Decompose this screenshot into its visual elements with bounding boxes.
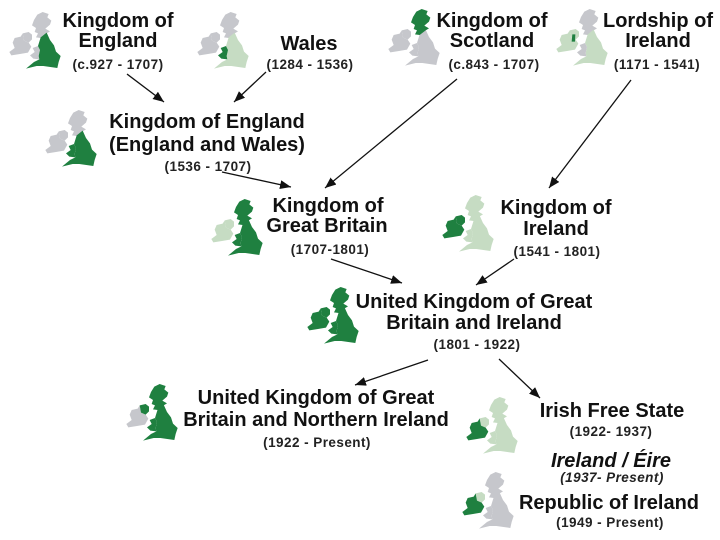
arrow: United Kingdom to Irish Free State — [499, 359, 540, 398]
heading: Kingdom of England: England — [79, 30, 157, 52]
date: 1922 - 1937: (1922- 1937) — [570, 424, 652, 439]
map: Kingdom of Scotland — [388, 9, 440, 66]
heading: Lordship of Ireland: Ireland — [625, 30, 691, 52]
heading: Kingdom of Great Britain: Great Britain — [266, 215, 388, 237]
heading: United Kingdom of Great Britain and Ireland: Britain and Ireland — [386, 312, 562, 334]
heading: Irish Free State: Irish Free State — [540, 400, 684, 422]
heading: Kingdom of Ireland: Kingdom of — [500, 197, 612, 219]
date: 1171 - 1541: (1171 - 1541) — [614, 57, 700, 72]
heading: United Kingdom of Great Britain and Ireland: United Kingdom of Great — [356, 291, 592, 313]
date: 1707-1801: (1707-1801) — [291, 242, 369, 257]
heading: Kingdom of England (England and Wales): Kingdom of England — [109, 111, 305, 133]
heading: Kingdom of England (England and Wales): (England and Wales) — [109, 134, 305, 156]
map: Kingdom of England — [9, 12, 61, 69]
map: Wales — [197, 12, 249, 69]
heading: Kingdom of Scotland: Kingdom of — [436, 10, 548, 32]
heading: Kingdom of Great Britain: Kingdom of — [272, 195, 384, 217]
date: 1801 - 1922: (1801 - 1922) — [434, 337, 520, 352]
heading: United Kingdom of Great Britain and Northern Ireland: Britain and Northern Ireland — [183, 409, 449, 431]
arrow: United Kingdom to Northern Ireland era — [355, 360, 428, 385]
arrow: England to England and Wales — [127, 74, 164, 102]
heading: Wales: Wales — [280, 33, 338, 55]
map: United Kingdom of Great Britain and Northern Ireland — [126, 384, 178, 441]
heading: Kingdom of England: Kingdom of — [62, 10, 174, 32]
map: Republic of Ireland — [462, 472, 514, 529]
date: 1541 - 1801: (1541 - 1801) — [514, 244, 600, 259]
heading: Lordship of Ireland: Lordship of — [603, 10, 713, 32]
date: 1536 - 1707: (1536 - 1707) — [165, 159, 251, 174]
heading: Ireland / Éire: Ireland / Éire — [551, 449, 671, 472]
map: Kingdom of Ireland — [442, 195, 494, 252]
heading: Kingdom of Scotland: Scotland — [450, 30, 534, 52]
map: Lordship of Ireland — [556, 9, 608, 66]
arrow: Wales to England and Wales — [234, 72, 266, 102]
heading: United Kingdom of Great Britain and Northern Ireland: United Kingdom of Great — [198, 387, 434, 409]
heading: Republic of Ireland: Republic of Ireland — [519, 492, 699, 514]
date: 1922 - Present: (1922 - Present) — [263, 435, 371, 450]
arrow: Kingdom of Ireland to United Kingdom — [476, 259, 514, 285]
arrow: England and Wales to Great Britain — [222, 172, 291, 187]
map: Kingdom of Great Britain — [211, 199, 263, 256]
arrow: Scotland to Great Britain — [325, 79, 457, 188]
date: 1284 - 1536: (1284 - 1536) — [267, 57, 353, 72]
map: United Kingdom of Great Britain and Ireland — [307, 287, 359, 344]
date: c.927 - 1707: (c.927 - 1707) — [72, 57, 164, 72]
heading: Kingdom of Ireland: Ireland — [523, 218, 589, 240]
map: Irish Free State — [466, 397, 518, 454]
date: 1937 - Present: (1937- Present) — [560, 470, 664, 485]
date: c.843 - 1707: (c.843 - 1707) — [448, 57, 540, 72]
arrow: Lordship of Ireland to Kingdom of Ireland — [549, 80, 631, 188]
arrow: Great Britain to United Kingdom — [331, 259, 402, 283]
map: Kingdom of England and Wales — [45, 110, 97, 167]
date: 1949 - Present: (1949 - Present) — [556, 515, 664, 530]
